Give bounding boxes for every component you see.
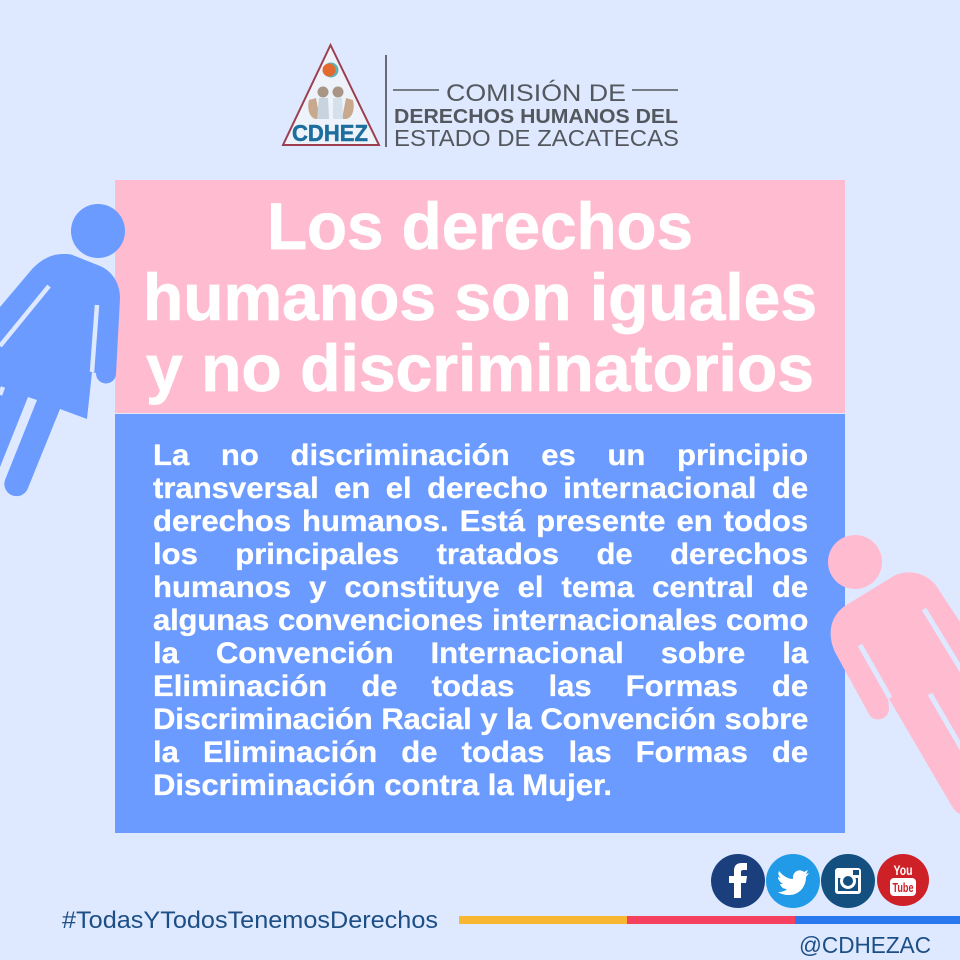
text: social handle: @CDHEZAC xyxy=(799,932,931,958)
logo: organisation name: COMISIÓN DE xyxy=(446,80,626,107)
panel: body background xyxy=(115,414,845,833)
icon: youtube xyxy=(877,854,929,906)
heading: title: humanos son iguales xyxy=(143,260,817,334)
text block: body paragraph: la Convención Internacional sobre la xyxy=(153,637,808,670)
text: hashtag: #TodasYTodosTenemosDerechos xyxy=(62,907,438,934)
heading: title: y no discriminatorios xyxy=(146,331,814,405)
text block: body paragraph: La no discriminación es un principio xyxy=(153,439,808,472)
icon: youtube: You xyxy=(894,862,912,878)
panel: title background xyxy=(115,180,845,413)
logo: organisation name: ESTADO DE ZACATECAS xyxy=(394,125,679,151)
icon: youtube: Tube xyxy=(892,880,914,895)
icon: blue woman figure xyxy=(0,204,125,496)
logo: vertical divider xyxy=(385,55,386,147)
icon: twitter xyxy=(766,854,820,908)
icon: facebook xyxy=(711,854,765,908)
bar: tricolor strip xyxy=(459,916,960,924)
text block: body paragraph: Discriminación contra la Mujer. xyxy=(153,769,612,802)
logo: organisation name: DERECHOS HUMANOS DEL xyxy=(394,105,678,128)
text block: body paragraph: derechos humanos. Está presente en todos xyxy=(153,505,808,538)
icon: instagram xyxy=(821,854,875,908)
text block: body paragraph: Eliminación de todas las Formas de xyxy=(153,670,808,703)
text block: body paragraph: la Eliminación de todas las Formas de xyxy=(153,736,808,769)
text block: body paragraph: los principales tratados de derechos xyxy=(153,538,808,571)
text block: body paragraph: Discriminación Racial y la Convención sobre xyxy=(153,703,808,736)
text block: body paragraph: algunas convenciones internacionales como xyxy=(153,604,808,637)
heading: title: Los derechos xyxy=(267,189,693,263)
logo: organisation name xyxy=(393,80,679,151)
text block: body paragraph: transversal en el derecho internacional de xyxy=(153,472,808,505)
logo: CDHEZ emblem: CDHEZ xyxy=(292,120,368,146)
text block: body paragraph: humanos y constituye el tema central de xyxy=(153,571,808,604)
heading: title xyxy=(143,189,817,405)
text block: body paragraph xyxy=(153,439,808,802)
icon: pink man figure xyxy=(828,535,960,814)
logo: CDHEZ emblem xyxy=(282,42,380,146)
